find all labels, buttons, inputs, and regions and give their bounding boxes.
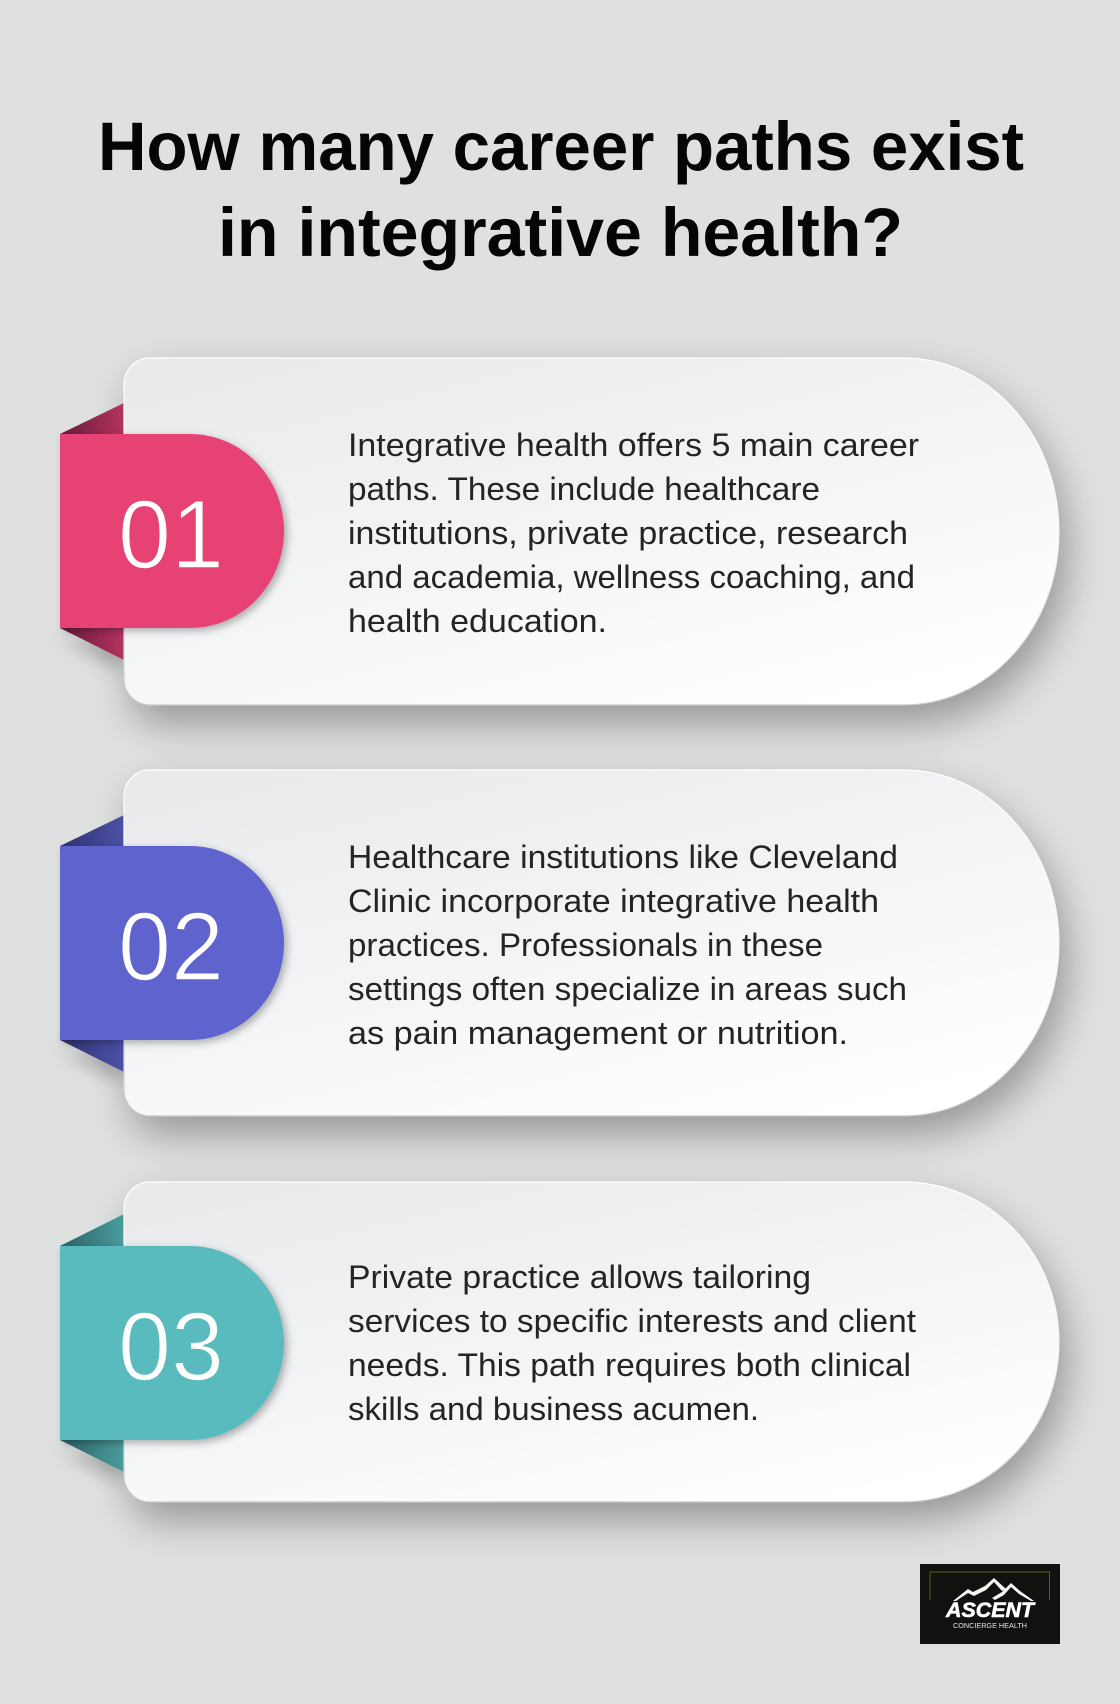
text: step 03 description: needs. This path requires both clinical bbox=[348, 1347, 911, 1383]
text: step 02 description: Clinic incorporate integrative health bbox=[348, 883, 879, 919]
text: step 03 description: skills and business acumen. bbox=[348, 1391, 759, 1427]
badge: 01: 01 bbox=[118, 480, 224, 589]
badge: 02 bbox=[60, 846, 284, 1040]
text: step 01 description: institutions, private practice, research bbox=[348, 515, 908, 551]
badge: 02: 02 bbox=[118, 892, 224, 1001]
badge: 03: 03 bbox=[118, 1292, 224, 1401]
text: step 02 description bbox=[348, 839, 907, 1051]
panel: step 02 bbox=[60, 770, 1067, 1134]
text: step 02 description: settings often specialize in areas such bbox=[348, 971, 907, 1007]
text: step 02 description: as pain management or nutrition. bbox=[348, 1015, 848, 1051]
text: step 01 description: Integrative health offers 5 main career bbox=[348, 427, 919, 463]
text: step 02 description: Healthcare institutions like Cleveland bbox=[348, 839, 898, 875]
text: step 03 description bbox=[348, 1259, 916, 1427]
text: step 02 description: practices. Professionals in these bbox=[348, 927, 823, 963]
icon: mountains bbox=[953, 1578, 1034, 1601]
title bbox=[98, 108, 1024, 271]
title: How many career paths exist bbox=[98, 108, 1024, 185]
panel: step 01 bbox=[60, 358, 1067, 723]
logo: Ascent Concierge Health bbox=[920, 1564, 1060, 1644]
text: step 01 description: paths. These include healthcare bbox=[348, 471, 820, 507]
badge: 03 bbox=[60, 1246, 284, 1440]
logo: Ascent Concierge Health: ASCENT bbox=[945, 1599, 1036, 1622]
panel: step 03 bbox=[60, 1182, 1067, 1520]
text: step 01 description: health education. bbox=[348, 603, 607, 639]
text: step 03 description: services to specific interests and client bbox=[348, 1303, 916, 1339]
text: step 03 description: Private practice allows tailoring bbox=[348, 1259, 811, 1295]
logo: Ascent Concierge Health: CONCIERGE HEALTH bbox=[953, 1621, 1027, 1630]
text: step 01 description bbox=[348, 427, 919, 639]
badge: 01 bbox=[60, 434, 284, 628]
text: step 01 description: and academia, wellness coaching, and bbox=[348, 559, 915, 595]
title: in integrative health? bbox=[218, 194, 903, 271]
